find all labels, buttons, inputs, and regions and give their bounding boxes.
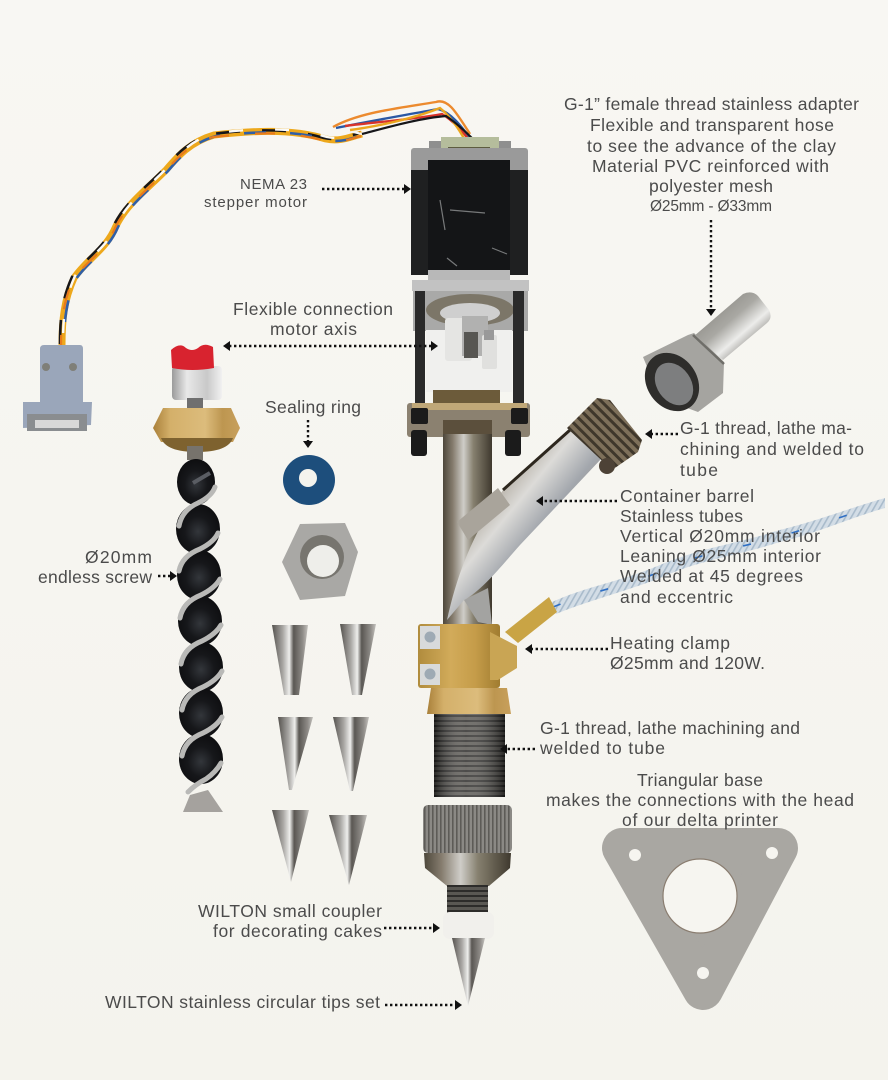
label: G-1 thread upper: tube (680, 460, 718, 480)
label: container barrel: and eccentric (620, 587, 733, 607)
label: heating clamp: Heating clamp (610, 633, 730, 653)
label: endless screw: endless screw (38, 567, 152, 587)
arrow: endless screw (158, 571, 177, 581)
arrow: tips (385, 1000, 462, 1010)
arrow: container barrel (536, 496, 617, 506)
icon: NEMA 23 stepper motor (411, 137, 529, 392)
arrow: stepper motor (322, 184, 411, 194)
label: triangular base (546, 770, 854, 830)
arrow: hose adapter (706, 220, 716, 316)
icon: brass nut and thread (427, 688, 511, 797)
icon: vertical stainless tube (443, 420, 492, 625)
label: G-1 thread lower: welded to tube (539, 738, 665, 758)
arrow: coupler (384, 923, 440, 933)
label: hose adapter: G-1” female thread stainless adapter (564, 94, 859, 114)
label: triangular base: of our delta printer (622, 810, 778, 830)
label: flexible connection (233, 299, 393, 339)
icon: leaning container barrel (447, 398, 642, 625)
label: flexible connection: Flexible connection (233, 299, 393, 319)
label: G-1 thread lower: G-1 thread, lathe machining and (540, 718, 800, 738)
icon: D-sub connector (23, 345, 92, 431)
arrow: flexible connection two-way (223, 341, 438, 351)
label: stepper motor (204, 176, 307, 211)
label: WILTON coupler: WILTON small coupler (198, 901, 382, 921)
icon: threaded rods and flange (407, 291, 530, 456)
label: container barrel: Welded at 45 degrees (620, 566, 803, 586)
icon: heating clamp (418, 498, 885, 688)
icon: nozzle assembly (423, 805, 512, 1006)
label: sealing ring: Sealing ring (265, 397, 361, 417)
label: WILTON tips: WILTON stainless circular tips set (105, 992, 380, 1012)
icon: triangular base (622, 847, 778, 990)
label: endless screw: Ø20mm (85, 547, 152, 567)
icon: hex nut (282, 523, 358, 600)
label: stepper motor: NEMA 23 (240, 176, 307, 193)
label: triangular base: Triangular base (637, 770, 763, 790)
label: heating clamp: Ø25mm and 120W. (610, 653, 765, 673)
label: container barrel: Leaning Ø25mm interior (620, 546, 821, 566)
label: G-1 thread upper (680, 418, 864, 480)
label: container barrel: Stainless tubes (620, 506, 743, 526)
label: heating clamp (610, 633, 765, 673)
label: hose adapter: Material PVC reinforced with (592, 156, 829, 176)
icon: multicolour motor cable (60, 100, 480, 347)
label: triangular base: makes the connections with the head (546, 790, 854, 810)
icon: endless screw (153, 345, 240, 812)
label: hose adapter: polyester mesh (649, 176, 773, 196)
label: hose adapter (564, 94, 859, 215)
label: hose adapter: Ø25mm - Ø33mm (650, 198, 772, 215)
label: flexible connection: motor axis (270, 319, 357, 339)
label: G-1 thread lower (539, 718, 800, 758)
label: container barrel: Vertical Ø20mm interior (620, 526, 820, 546)
label: WILTON coupler (198, 901, 382, 941)
arrow: sealing ring (303, 420, 313, 448)
icon: hose adapter (634, 292, 771, 422)
label: hose adapter: Flexible and transparent hose (590, 115, 834, 135)
label: container barrel (620, 486, 821, 607)
label: hose adapter: to see the advance of the clay (587, 136, 836, 156)
icon: flexible motor coupling (445, 316, 497, 369)
label: WILTON coupler: for decorating cakes (213, 921, 382, 941)
icon: sealing ring (283, 455, 335, 505)
label: container barrel: Container barrel (620, 486, 754, 506)
label: endless screw (38, 547, 152, 587)
label: G-1 thread upper: G-1 thread, lathe ma- (680, 418, 852, 438)
label: stepper motor: stepper motor (204, 194, 307, 211)
arrow: heating clamp (525, 644, 608, 654)
icon: circular tips set (272, 624, 376, 885)
arrow: upper thread (645, 429, 678, 439)
label: G-1 thread upper: chining and welded to (680, 439, 864, 459)
arrow: lower thread (500, 744, 535, 754)
